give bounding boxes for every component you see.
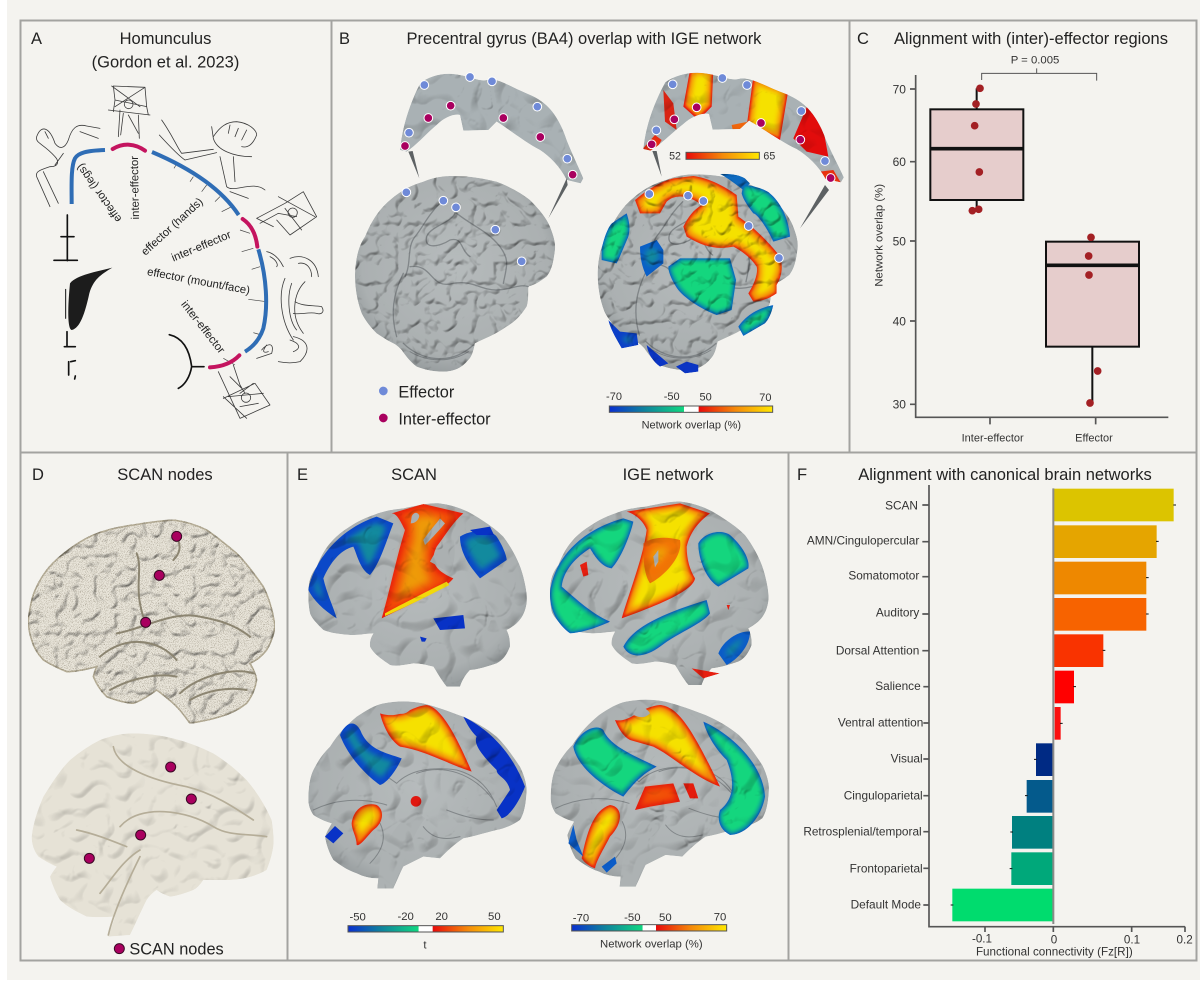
black sketch marks [54, 215, 204, 388]
y axis: 40 [893, 314, 906, 328]
colour bar network overlap: 50 [700, 392, 712, 404]
title: SCAN: SCAN [391, 466, 437, 484]
y axis: 30 [893, 398, 906, 412]
colour bar: network overlap: 70 [714, 912, 726, 924]
box plot [874, 54, 1168, 445]
box: inter-effector [930, 84, 1023, 214]
panel A: homunculus [20, 20, 332, 452]
label: inter-effector: inter-effector [129, 156, 142, 219]
network labels: AMN/Cingulopercular [807, 534, 919, 548]
IGE medial brain [551, 700, 769, 887]
panel letter A: A [31, 30, 42, 48]
legend: Inter-effector [398, 410, 491, 428]
significance bracket: P = 0.005 [1011, 54, 1059, 66]
y axis [874, 75, 1168, 445]
network labels: Default Mode [851, 898, 921, 912]
colour bar: network overlap: -70 [573, 912, 589, 924]
panel letter C: C [857, 30, 869, 48]
colour bar network overlap: -70 [606, 391, 622, 403]
title C: Alignment with (inter)-effector regions [894, 30, 1168, 48]
network labels: Cinguloparietal [844, 789, 923, 803]
network labels: Ventral attention [838, 716, 923, 730]
panel letter B: B [339, 30, 350, 48]
y axis: Effector [1075, 433, 1113, 445]
SCAN medial brain [308, 701, 527, 888]
title: Homunculus: (Gordon et al. 2023) [92, 54, 239, 72]
network labels: Auditory [876, 606, 919, 620]
axes [922, 485, 1185, 932]
sketch: hand and arm [159, 120, 265, 198]
title B: Precentral gyrus (BA4) overlap with IGE network [407, 30, 762, 48]
colour bar: t: 50 [488, 911, 501, 923]
x axis labels [972, 933, 1193, 958]
right precentral strip with overlap colours [642, 70, 845, 190]
label: effector hands: effector (hands) [139, 196, 206, 258]
panel D: SCAN nodes [20, 452, 288, 960]
title: Homunculus: Homunculus [120, 30, 211, 48]
colour bar network overlap: -50 [664, 391, 680, 403]
arc: effector hands [152, 152, 239, 215]
label: effector legs: effector (legs) [74, 161, 124, 224]
panel C: alignment with effector regions [850, 20, 1196, 452]
y axis: 50 [893, 234, 906, 248]
sketch: figure head [124, 100, 133, 109]
colour bar: network overlap: Network overlap (%) [600, 939, 703, 951]
panel letter F: F [797, 466, 807, 484]
colour bar: t: t [423, 940, 427, 952]
arc: inter-effector right [243, 219, 257, 247]
x axis labels: Functional connectivity (Fz[R]) [976, 945, 1133, 958]
bar chart [803, 485, 1193, 958]
title D: SCAN nodes [117, 466, 213, 484]
network labels: Retrosplenial/temporal [803, 824, 922, 838]
homunculus diagram [36, 86, 323, 418]
y axis: Inter-effector [962, 432, 1024, 444]
network labels: Visual [891, 752, 923, 766]
error marks [951, 505, 1176, 905]
sketch: marionette right [257, 192, 317, 235]
panel letter D: D [32, 466, 44, 484]
network labels: Salience [875, 679, 921, 693]
network labels: Somatomotor [848, 569, 919, 583]
IGE lateral brain [550, 502, 769, 685]
significance bracket [982, 54, 1097, 81]
x axis labels: 0.2 [1177, 933, 1193, 946]
colour bar: t: -50 [349, 911, 366, 923]
colour bar network overlap: 70 [759, 392, 771, 404]
colour bar: network overlap: 50 [659, 912, 672, 924]
sketch: marionette bottom [218, 365, 270, 418]
title: IGE network: IGE network [623, 466, 714, 484]
network labels [803, 499, 923, 912]
sketch: eye, nose and mouth [257, 252, 323, 363]
sketch: figure head bottom [241, 393, 251, 402]
sketch: figure head right [288, 208, 297, 217]
small colour bar 52 to 65: 65 [763, 150, 775, 162]
label: inter-effector: inter-effector [170, 229, 233, 264]
bars [952, 489, 1174, 921]
legend: SCAN nodes: SCAN nodes [129, 941, 224, 959]
panel letter E: E [297, 466, 308, 484]
x axis labels: 0 [1051, 933, 1058, 946]
colour bar network overlap [606, 391, 773, 431]
box: effector [1046, 233, 1139, 407]
pointer wedges right [652, 151, 829, 228]
panel B: precentral gyrus overlap [332, 20, 850, 452]
colour bar: t: 20 [435, 911, 448, 923]
arc: inter-effector bottom [210, 355, 239, 367]
arc: inter-effector top [113, 145, 145, 151]
panel F: alignment with canonical brain networks [788, 452, 1196, 960]
title F: Alignment with canonical brain networks [858, 466, 1152, 484]
medial brain drawing [32, 733, 274, 937]
x axis labels: 0.1 [1124, 933, 1140, 946]
SCAN lateral brain [308, 503, 527, 687]
network labels: SCAN [885, 499, 918, 513]
left brain surface with nodes [355, 176, 555, 372]
colour bar: t [348, 911, 503, 952]
sketch: leg [36, 125, 100, 207]
small colour bar 52 to 65 [669, 150, 775, 162]
colour bar: t: -20 [397, 911, 414, 923]
arc: effector mouth and face [245, 249, 266, 352]
left precentral strip with nodes [400, 73, 583, 183]
y axis: 60 [893, 155, 906, 169]
legend [379, 383, 491, 428]
arc: effector legs [72, 150, 105, 204]
sketch: marionette figure top [108, 86, 150, 138]
lateral brain drawing [28, 520, 275, 723]
y axis: 70 [893, 82, 906, 96]
colour bar: network overlap: -50 [624, 912, 641, 924]
colour bar network overlap: Network overlap (%) [642, 419, 741, 431]
colour bar: network overlap [572, 912, 727, 951]
network labels: Dorsal Attention [836, 644, 919, 658]
label: effector mouth/face: effector (mount/face) [146, 266, 251, 297]
right brain surface with overlap map [598, 174, 798, 373]
x axis labels: -0.1 [972, 933, 992, 946]
pointer wedges left [408, 151, 568, 218]
legend: Effector [398, 383, 455, 401]
y axis: Network overlap (%) [874, 184, 886, 287]
network labels: Frontoparietal [850, 861, 923, 875]
tick marks [174, 165, 267, 365]
label: inter-effector: inter-effector [178, 299, 227, 356]
zero line [1050, 488, 1056, 924]
panel E: SCAN and IGE network maps [288, 452, 788, 960]
small colour bar 52 to 65: 52 [669, 150, 681, 162]
